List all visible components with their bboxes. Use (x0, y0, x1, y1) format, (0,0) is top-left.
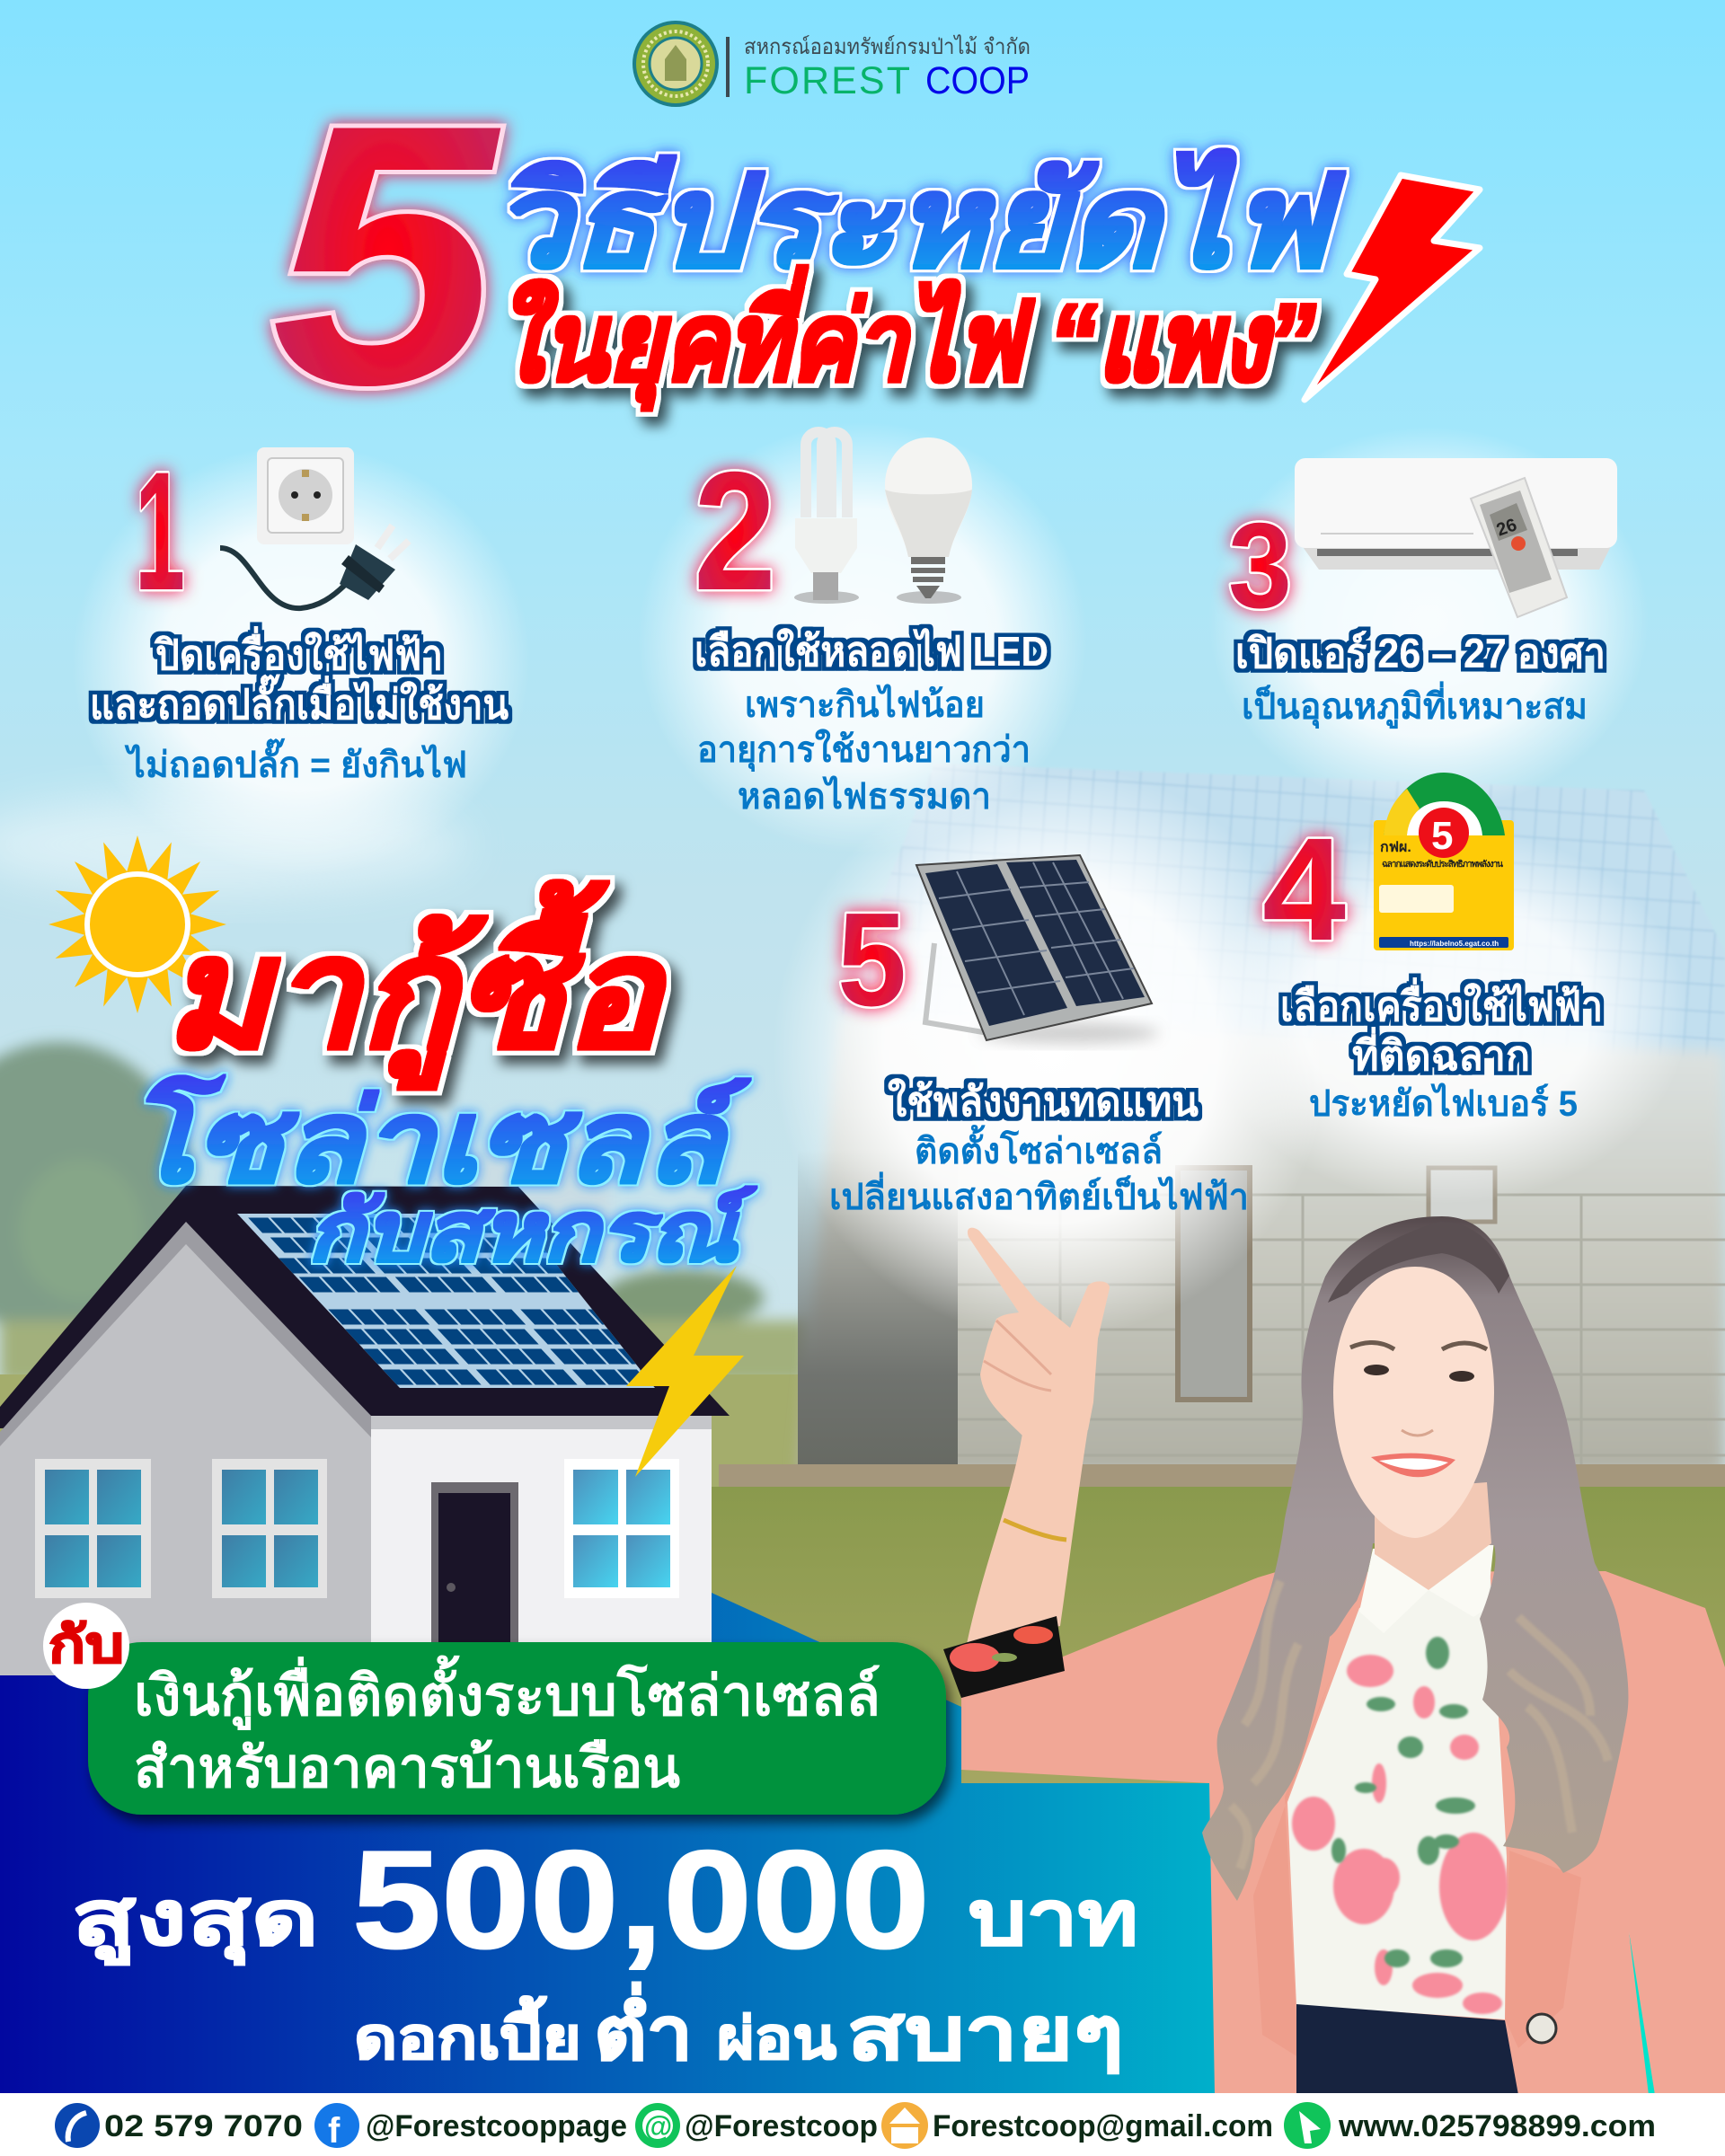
promo heading line 3: กับสหกรณ์ (307, 1186, 757, 1278)
green loan banner (88, 1642, 946, 1815)
icon: air conditioner and remote: 26 (1494, 515, 1519, 541)
bottom blue panel (0, 1593, 1276, 2095)
background: field (0, 1374, 898, 1734)
window left (35, 1459, 151, 1598)
house solar array (237, 1214, 686, 1388)
background: distant panels behind house (431, 1150, 611, 1267)
icon: energy label no.5: 5 (1431, 814, 1453, 858)
tip 2 note: อายุการใช้งานยาวกว่า (697, 729, 1031, 773)
icon: energy label no.5 (1374, 773, 1514, 950)
badge กับ (43, 1603, 129, 1689)
contact phone (55, 2103, 303, 2148)
tip 4 (1262, 773, 1603, 1124)
number 1: 1 (135, 437, 185, 625)
background: building roof with solar panels (836, 764, 1725, 1060)
tip 5 note: ติดตั้งโซล่าเซลล์ (915, 1125, 1163, 1171)
contact website: www.025798899.com (1338, 2109, 1656, 2143)
hair waves (1231, 1581, 1608, 1869)
glow blob 5 (773, 764, 1330, 1339)
banner box (88, 1642, 946, 1815)
icon: air conditioner and remote (1295, 458, 1617, 617)
door (431, 1482, 518, 1675)
banner line 2: สำหรับอาคารบ้านเรือน (134, 1737, 680, 1799)
icon: energy label no.5: กฟผ. (1380, 840, 1411, 855)
banner line 1: เงินกู้เพื่อติดตั้งระบบโซล่าเซลล์ (134, 1655, 880, 1730)
tip 2 note: หลอดไฟธรรมดา (738, 775, 991, 817)
background: clouds (0, 795, 467, 894)
label สบายๆ: สบายๆ (847, 1993, 1124, 2075)
tip 3 note: เป็นอุณหภูมิที่เหมาะสม (1242, 681, 1588, 729)
tip 5 (829, 855, 1249, 1217)
tip 3 heading: เปิดแอร์ 26 – 27 องศา (1235, 630, 1606, 676)
face (1328, 1222, 1509, 1538)
contact line: @Forestcoop (685, 2109, 878, 2143)
footer contact bar (0, 2093, 1725, 2156)
tip 1 (90, 437, 509, 785)
title line 2: ในยุคที่ค่าไฟ “แพง” (496, 265, 1315, 411)
house gable (0, 1222, 371, 1675)
logo (632, 21, 1031, 107)
contact email: Forestcoop@gmail.com (933, 2109, 1273, 2143)
icon: red lightning bolt (1305, 175, 1480, 400)
label ต่ำ: ต่ำ (594, 1982, 693, 2075)
glow blob 2 (638, 422, 1087, 853)
icon: energy label no.5: ฉลากแสดงระดับประสิทธิภาพพลังงาน (1382, 859, 1503, 870)
label สูงสุด: สูงสุด (72, 1876, 319, 1966)
contact line (635, 2103, 878, 2148)
logo thai name: สหกรณ์ออมทรัพย์กรมป่าไม้ จำกัด (744, 34, 1031, 59)
background: tree line (0, 1042, 809, 1383)
bracelet (1004, 1520, 1066, 1540)
badge กับ: กับ (49, 1616, 124, 1673)
glow blob 1 (72, 445, 530, 876)
title line 1: วิธีประหยัดไฟ (492, 149, 1345, 294)
tip 1 note: ไม่ถอดปลั๊ก = ยังกินไฟ (124, 738, 467, 785)
label บาท: บาท (969, 1876, 1138, 1960)
number 5: 5 (837, 886, 907, 1034)
jacket (961, 1571, 1725, 2095)
tip 4 heading (1280, 977, 1603, 1079)
hair (1202, 1216, 1628, 1901)
logo seal (632, 21, 719, 107)
title big 5: 5 (271, 49, 505, 462)
tip 1 heading: และถอดปลั๊กเมื่อไม่ใช้งาน (90, 674, 509, 728)
tip 2 heading: เลือกใช้หลอดไฟ LED (694, 627, 1048, 675)
teal sliver (1629, 1931, 1655, 2095)
neck (1375, 1482, 1491, 1590)
background: building wall (798, 1015, 1725, 1473)
tip 5 note: เปลี่ยนแสงอาทิตย์เป็นไฟฟ้า (829, 1171, 1249, 1217)
tip 1 heading: ปิดเครื่องใช้ไฟฟ้า (154, 626, 443, 678)
number 2: 2 (694, 437, 776, 625)
contact facebook: f (328, 2111, 341, 2151)
jacket lapel shading (1253, 1680, 1581, 2057)
house illustration (0, 1186, 744, 1675)
label ผ่อน: ผ่อน (717, 2006, 836, 2071)
contact line: @ (644, 2110, 672, 2143)
tip 2 note (697, 684, 1031, 817)
number 4: 4 (1262, 807, 1346, 971)
jacket button (1527, 2014, 1556, 2043)
tip 4 note: ประหยัดไฟเบอร์ 5 (1309, 1082, 1578, 1124)
window middle (212, 1459, 327, 1598)
house roof (0, 1186, 730, 1428)
number 3: 3 (1228, 498, 1292, 633)
icon: socket and plug (220, 447, 409, 608)
navy skirt (1296, 2004, 1518, 2095)
promo heading line 2: โซล่าเซลล์ (126, 1074, 751, 1206)
house white wing (371, 1416, 712, 1675)
background: path and grass (710, 1464, 1725, 1797)
house gray wall (0, 1244, 371, 1675)
floral blouse (1287, 1541, 1508, 2019)
glow blob 3 (1208, 427, 1649, 813)
tip 4 heading: ที่ติดฉลาก (1352, 1027, 1530, 1079)
presenter (943, 1216, 1725, 2095)
loan terms (354, 1982, 1124, 2075)
logo divider (726, 37, 730, 97)
window right (564, 1459, 679, 1598)
amount: 500,000 (352, 1822, 930, 1977)
background: sky (0, 0, 1725, 1491)
contact email (881, 2102, 1273, 2149)
tip 5 heading: ใช้พลังงานทดแทน (888, 1077, 1199, 1125)
contact facebook: @Forestcooppage (366, 2109, 627, 2143)
tip 5 note (829, 1125, 1249, 1217)
contact facebook (314, 2103, 627, 2151)
promo heading line 1: มากู้ซื้อ (164, 880, 668, 1090)
icon: energy label no.5: https://labelno5.egat.co.th (1410, 940, 1499, 948)
icon: light bulbs (794, 432, 972, 604)
label ดอกเบี้ย: ดอกเบี้ย (354, 1996, 581, 2071)
tip 3 (1228, 458, 1617, 729)
tip 2 (694, 432, 1048, 817)
tip 2 note: เพราะกินไฟน้อย (745, 684, 985, 725)
loan amount (72, 1822, 1138, 1977)
tip 4 heading: เลือกเครื่องใช้ไฟฟ้า (1280, 977, 1603, 1029)
glow blob 4 (1204, 826, 1689, 1204)
contact website (1284, 2102, 1656, 2149)
tip 1 heading (90, 626, 509, 728)
icon: sun (49, 835, 226, 1013)
footer background (0, 2093, 1725, 2156)
floral cuff (943, 1616, 1065, 1698)
raised forearm and hand (967, 1228, 1110, 1644)
icon: yellow lightning (626, 1266, 744, 1477)
icon: portable solar panel (916, 855, 1159, 1044)
contact phone: 02 579 7070 (104, 2109, 303, 2143)
logo coop: COOP (925, 59, 1030, 102)
logo forest: FOREST (744, 59, 910, 102)
